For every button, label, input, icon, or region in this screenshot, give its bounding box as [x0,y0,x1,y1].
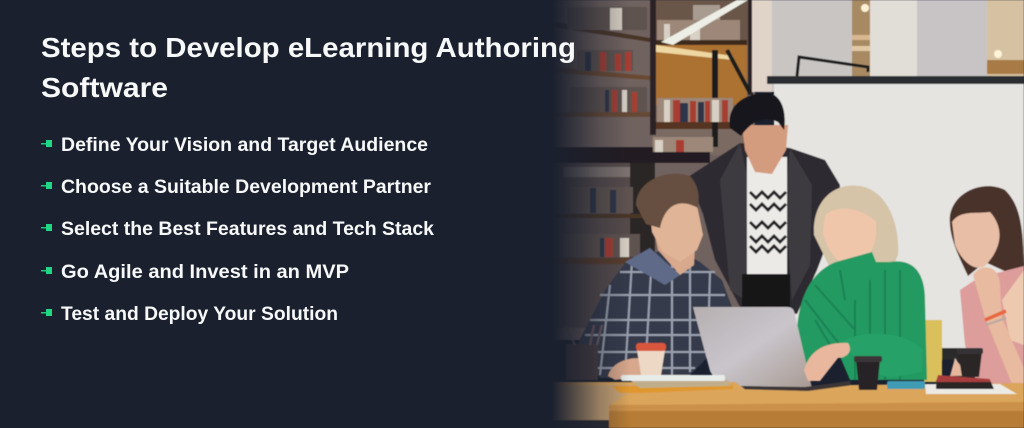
photo: students at a laptop in a library [545,0,1024,428]
title [41,32,576,103]
title: Software [41,72,168,103]
wooden table [545,382,1024,428]
projection screen [767,76,1024,352]
dark fade over photo [530,0,630,428]
woman right [950,186,1024,386]
metal brace [727,50,750,93]
steps list [41,135,434,325]
step 5: Test and Deploy Your Solution [61,304,338,325]
icon: green arrow bullet [41,224,52,231]
dark table edge behind right [942,348,972,360]
coffee cup centre [854,356,882,390]
icon: green arrow bullet [41,182,52,189]
step 4: Go Agile and Invest in an MVP [61,262,349,283]
icon: green arrow bullet [41,267,52,274]
icon: green arrow bullet [41,140,52,147]
step 2: Choose a Suitable Development Partner [61,177,432,198]
clipboard with notebook [925,375,1017,394]
ceiling lamp strip [661,0,748,45]
step 1: Define Your Vision and Target Audience [61,135,428,156]
coffee cup right [957,348,983,377]
title: Steps to Develop eLearning Authoring [41,32,576,63]
icon: green arrow bullet [41,309,52,316]
man seated left [577,174,732,380]
back wall [752,0,1024,92]
step 3: Select the Best Features and Tech Stack [61,219,434,240]
hand on keyboard [804,343,850,381]
laptop [693,307,851,391]
pen holder [565,325,602,380]
yellow chair [924,320,942,382]
standing man [688,93,840,314]
library bookshelves [545,0,755,340]
stack of books [612,375,733,393]
blue phone case [887,381,925,389]
paper cup [636,343,666,375]
woman in green sweater [797,185,927,380]
